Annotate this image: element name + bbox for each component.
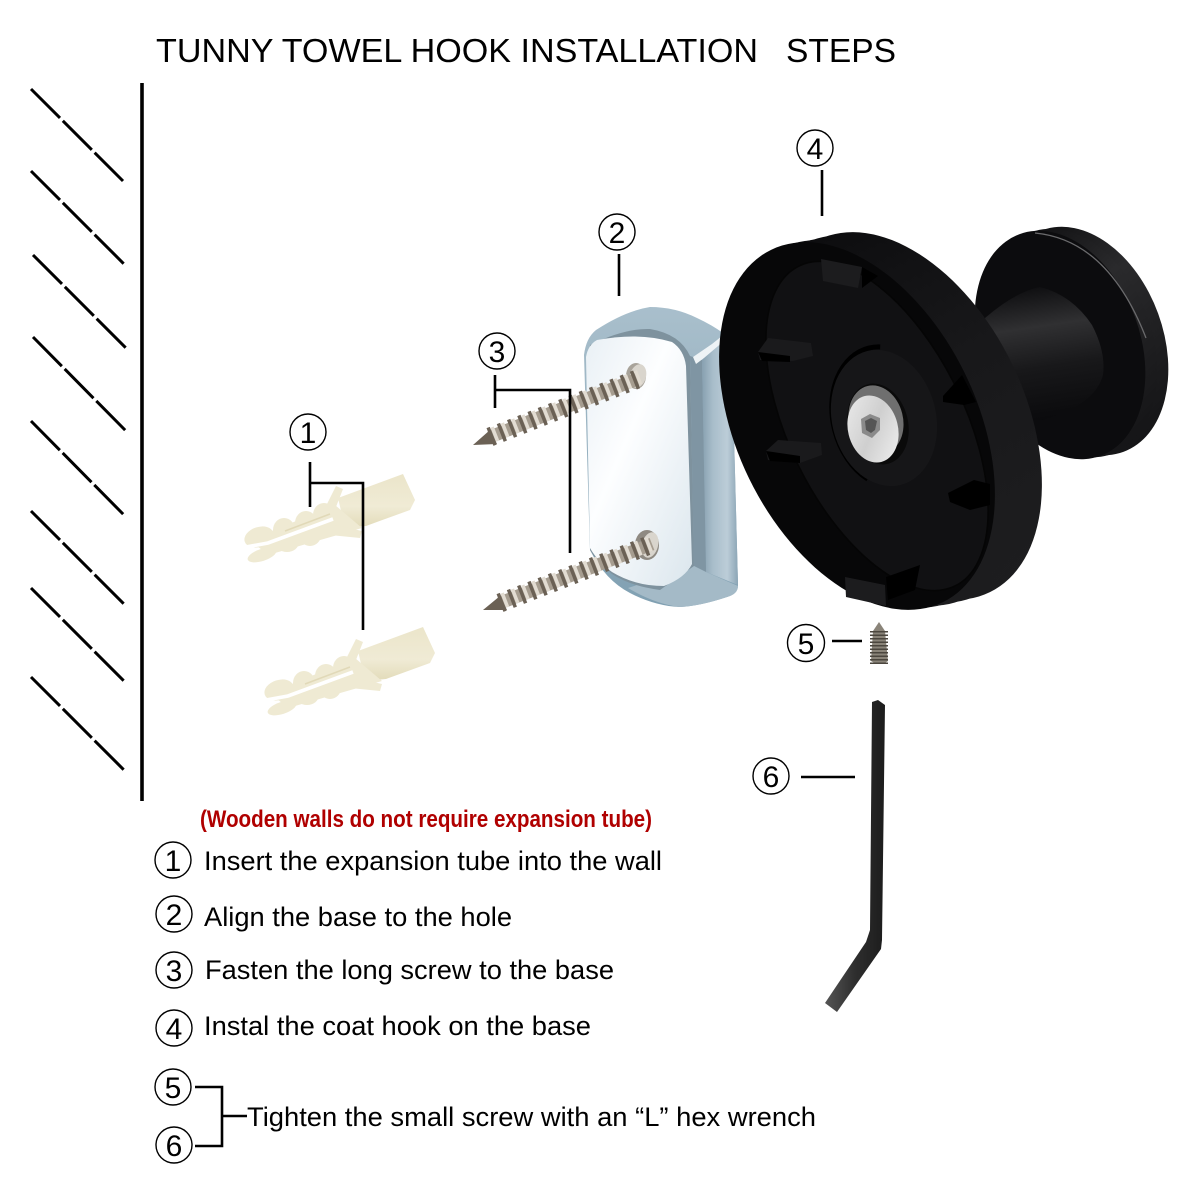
callout 3: 3 [489, 336, 505, 369]
long screw, lower [483, 530, 661, 610]
step 5 and 6 with bracket: 6 [166, 1130, 182, 1163]
coat hook [663, 187, 1199, 655]
hook locating tabs [758, 259, 990, 606]
title: TUNNY TOWEL HOOK INSTALLATION [156, 32, 758, 69]
callout 2: 2 [609, 217, 625, 250]
hook back plate [944, 203, 1199, 483]
callout 5: 5 [798, 628, 814, 661]
callout 3 [479, 333, 570, 553]
callout 6 [753, 758, 855, 794]
step 1: 1 [165, 845, 181, 878]
hook stem [985, 287, 1104, 420]
wooden wall note: (Wooden walls do not require expansion tube) [200, 806, 652, 833]
step 5 and 6 with bracket [155, 1069, 816, 1163]
step 3: Fasten the long screw to the base [205, 955, 614, 985]
expansion tube, lower [262, 627, 435, 718]
small set screw [871, 622, 888, 664]
step 4: Instal the coat hook on the base [204, 1011, 591, 1041]
hook centre boss [817, 335, 955, 499]
hook front disc [663, 187, 1098, 655]
callout 4 [797, 130, 833, 216]
step 2: Align the base to the hole [204, 902, 512, 932]
long screw, upper [473, 362, 649, 445]
step 1: Insert the expansion tube into the wall [204, 846, 662, 876]
callout 1: 1 [300, 417, 316, 450]
title: STEPS [786, 32, 896, 69]
callout 2 [599, 214, 635, 296]
hook centre screw [839, 377, 917, 471]
L hex wrench [825, 700, 885, 1012]
step 3: 3 [166, 955, 182, 988]
callout 1 [290, 414, 363, 630]
wall illustration [31, 83, 142, 801]
step 5 and 6 with bracket: Tighten the small screw with an “L” hex wrench [247, 1102, 816, 1132]
callout 4: 4 [807, 133, 823, 166]
step 4: 4 [166, 1013, 182, 1046]
step 2: 2 [166, 899, 182, 932]
callout 6: 6 [763, 761, 779, 794]
callout 5 [788, 624, 862, 662]
expansion tube, upper [242, 474, 415, 565]
metal base plate [584, 307, 738, 607]
step 5 and 6 with bracket: 5 [165, 1072, 181, 1105]
